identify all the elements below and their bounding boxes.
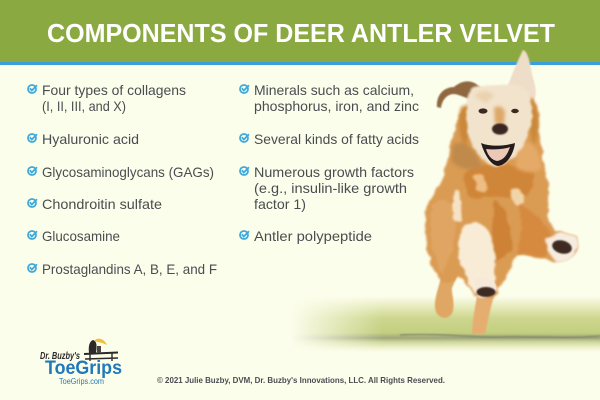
dog body <box>425 90 578 298</box>
dog left ear <box>437 81 482 108</box>
header banner <box>0 0 600 65</box>
dog front paw <box>474 277 497 298</box>
item: glucosamine: Glucosamine <box>42 229 120 244</box>
item: minerals: Minerals such as calcium, <box>254 83 414 98</box>
item: growth factors <box>240 165 414 212</box>
item: chondroitin: Chondroitin sulfate <box>42 197 162 212</box>
icon: person on bench with umbrella <box>84 339 118 361</box>
dog pale fur highlights <box>453 174 524 294</box>
item: minerals <box>240 83 419 114</box>
item: collagens <box>28 83 186 114</box>
logo: Dr. Buzby's ToeGrips <box>40 339 122 386</box>
dog front lower leg <box>472 296 494 334</box>
dog head <box>466 84 532 167</box>
dog back leg <box>435 274 458 318</box>
left column list <box>28 83 217 277</box>
dog eyes <box>478 108 519 114</box>
item: growth factors: (e.g., insulin-like growth <box>254 181 407 196</box>
item: hyaluronic acid: Hyaluronic acid <box>42 132 139 147</box>
right column list <box>240 83 419 244</box>
item: growth factors: Numerous growth factors <box>254 165 414 180</box>
item: collagens: Four types of collagens <box>42 83 186 98</box>
item: polypeptide: Antler polypeptide <box>254 229 372 244</box>
dog mouth <box>481 143 515 166</box>
photo: running golden retriever <box>425 50 579 334</box>
dog muzzle markings <box>474 92 505 124</box>
ToeGrips.com: ToeGrips.com <box>59 376 104 386</box>
dog neck side fur <box>451 98 542 172</box>
item: GAGs: Glycosaminoglycans (GAGs) <box>42 165 214 180</box>
Dr. Buzby's: Dr. Buzby's <box>40 351 80 362</box>
title: COMPONENTS OF DEER ANTLER VELVET <box>47 20 555 48</box>
grass <box>290 296 600 352</box>
copyright: © 2021 Julie Buzby, DVM, Dr. Buzby's Innovations, LLC. All Rights Reserved. <box>157 375 445 385</box>
dog raised ear <box>507 50 536 100</box>
item: minerals: phosphorus, iron, and zinc <box>254 99 419 114</box>
dog orange chest fur <box>431 164 552 275</box>
item: fatty acids: Several kinds of fatty acids <box>254 132 419 147</box>
dog raised paw <box>545 233 579 263</box>
dog nose <box>492 123 508 135</box>
item: collagens: (I, II, III, and X) <box>42 99 126 114</box>
ToeGrips: ToeGrips <box>45 358 122 379</box>
item: growth factors: factor 1) <box>254 197 306 212</box>
item: prostaglandins: Prostaglandins A, B, E, and F <box>42 262 217 277</box>
